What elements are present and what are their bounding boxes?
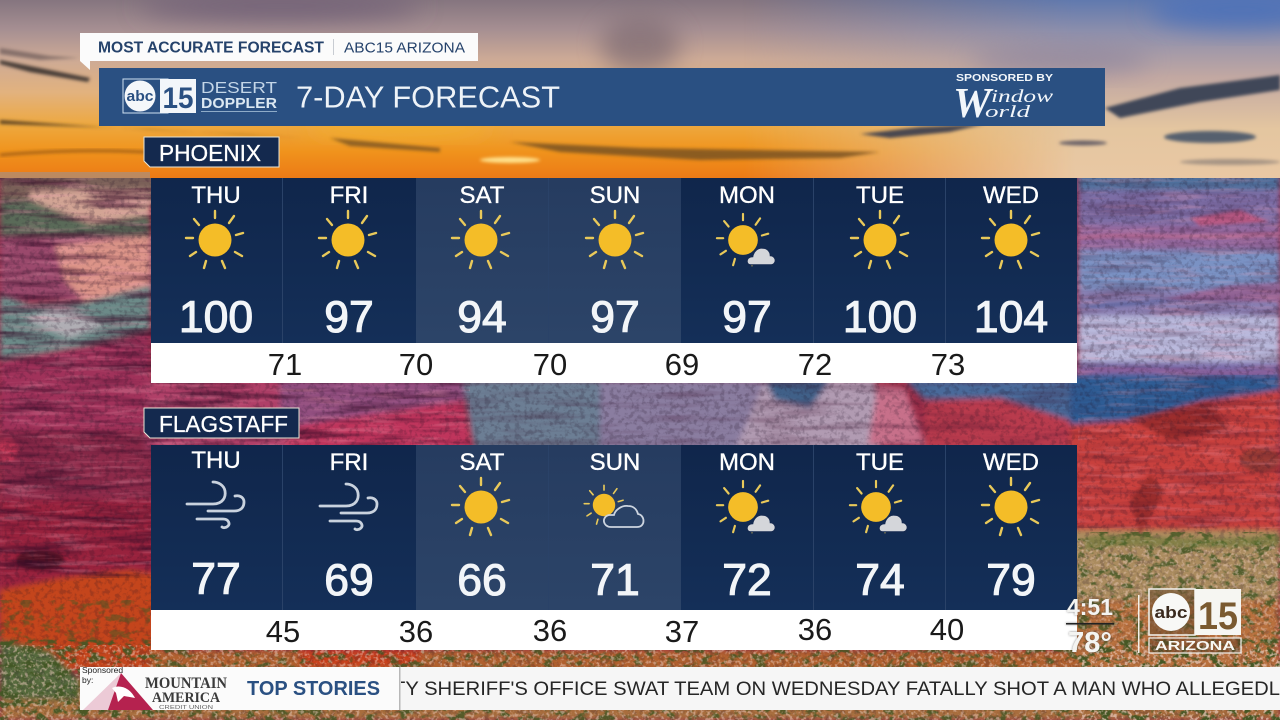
day headers: TUE xyxy=(856,182,904,209)
low temperature strip: 69 xyxy=(665,347,699,382)
station time and temperature: 78° xyxy=(1068,627,1112,659)
day headers: WED xyxy=(983,449,1039,476)
logo: abc15 Arizona xyxy=(1149,589,1241,653)
background: sunset sky xyxy=(0,0,1280,185)
label: Flagstaff: FLAGSTAFF xyxy=(159,411,288,437)
label: Phoenix: PHOENIX xyxy=(159,140,261,166)
high temperatures: 94 xyxy=(457,293,507,342)
logo: abc15 desert doppler xyxy=(123,79,278,115)
day headers: SUN xyxy=(590,449,640,476)
low temperature strip: 36 xyxy=(533,613,567,648)
high temperatures: 66 xyxy=(457,556,507,605)
day headers: WED xyxy=(983,182,1039,209)
low temperature strip: 73 xyxy=(931,347,965,382)
day headers: FRI xyxy=(330,182,368,209)
day headers: FRI xyxy=(330,449,368,476)
top tag: most accurate forecast: ABC15 ARIZONA xyxy=(344,40,465,56)
high temperatures xyxy=(179,293,1048,342)
weather icons xyxy=(187,478,1039,535)
sponsor: window world: SPONSORED BY xyxy=(956,72,1053,84)
high temperatures xyxy=(191,555,1036,605)
icon: sun behind outlined cloud xyxy=(584,485,644,527)
desert scrub speckle xyxy=(1078,532,1280,720)
low temperature strip: 37 xyxy=(665,614,699,649)
high temperatures: 97 xyxy=(590,293,640,342)
sponsor block: TOP STORIES xyxy=(247,678,380,700)
low temperature strip: 71 xyxy=(268,347,302,382)
day headers: SAT xyxy=(460,449,505,476)
logo: abc15 Arizona: 15 xyxy=(1198,595,1238,638)
day headers: SUN xyxy=(590,182,640,209)
logo: abc15 Arizona: ARIZONA xyxy=(1155,638,1236,653)
high temperatures: 72 xyxy=(722,556,772,605)
sponsor: window world: orld xyxy=(985,102,1031,121)
sponsor: window world: W xyxy=(953,81,994,127)
weather icons xyxy=(186,211,1039,268)
low temperature strip xyxy=(151,343,1077,383)
sponsor block: CREDIT UNION xyxy=(159,705,213,711)
logo: abc15 desert doppler: 15 xyxy=(162,82,194,115)
day headers: THU xyxy=(191,447,241,474)
top tag: most accurate forecast: MOST ACCURATE FORECAST xyxy=(98,40,325,56)
low temperature strip: 36 xyxy=(798,612,832,647)
high temperatures: 69 xyxy=(324,556,374,605)
day headers: MON xyxy=(719,449,775,476)
sponsor block: by: xyxy=(82,675,93,685)
high temperatures: 79 xyxy=(986,556,1036,605)
high temperatures: 71 xyxy=(590,556,640,605)
day headers: SAT xyxy=(460,182,505,209)
sponsor: window world: indow xyxy=(991,86,1053,106)
label: Phoenix xyxy=(144,137,279,167)
high temperatures: 97 xyxy=(324,293,374,342)
day headers: THU xyxy=(191,182,241,209)
high temperatures: 74 xyxy=(855,556,905,605)
canyon strata texture xyxy=(0,178,470,578)
panel: Phoenix forecast xyxy=(151,178,1077,383)
background: canyon landscape xyxy=(0,170,1280,720)
logo: abc15 desert doppler: abc xyxy=(126,89,154,105)
high temperatures: 97 xyxy=(722,293,772,342)
day headers xyxy=(191,182,1039,209)
low temperature strip: 40 xyxy=(930,612,964,647)
ticker headline: TY SHERIFF'S OFFICE SWAT TEAM ON WEDNESDAY FATALLY SHOT A MAN WHO ALLEGEDL xyxy=(393,679,1280,700)
divider xyxy=(1138,595,1140,653)
high temperatures: 100 xyxy=(843,293,917,342)
station time and temperature: 4:51 xyxy=(1067,594,1113,620)
panel: Flagstaff forecast xyxy=(151,445,1077,650)
low temperature strip: 72 xyxy=(798,347,832,382)
icon: Mountain America eagle xyxy=(83,673,153,710)
sponsor block xyxy=(80,665,400,711)
high temperatures: 100 xyxy=(179,293,253,342)
low temperature strip: 36 xyxy=(399,614,433,649)
sponsor block: MOUNTAIN xyxy=(145,675,227,692)
header bar xyxy=(99,68,1105,127)
top tag: most accurate forecast xyxy=(80,33,478,70)
day headers xyxy=(191,447,1039,476)
day headers: TUE xyxy=(856,449,904,476)
low temperature strip: 70 xyxy=(399,347,433,382)
ticker bar xyxy=(80,665,1280,711)
station time and temperature xyxy=(1066,594,1114,659)
day headers: MON xyxy=(719,182,775,209)
low temperature strip: 70 xyxy=(533,347,567,382)
logo: abc15 desert doppler: DESERT xyxy=(201,80,278,97)
high temperatures: 77 xyxy=(191,555,241,604)
low temperature strip xyxy=(151,610,1077,650)
sponsor block: AMERICA xyxy=(152,690,220,706)
high temperatures: 104 xyxy=(974,293,1048,342)
low temperature strip: 45 xyxy=(266,614,300,649)
sponsor block: Sponsored xyxy=(82,665,123,675)
header title: 7-DAY FORECAST xyxy=(296,80,560,114)
logo: abc15 desert doppler: DOPPLER xyxy=(201,95,277,112)
logo: abc15 Arizona: abc xyxy=(1154,603,1188,622)
sponsor: window world xyxy=(953,72,1053,127)
